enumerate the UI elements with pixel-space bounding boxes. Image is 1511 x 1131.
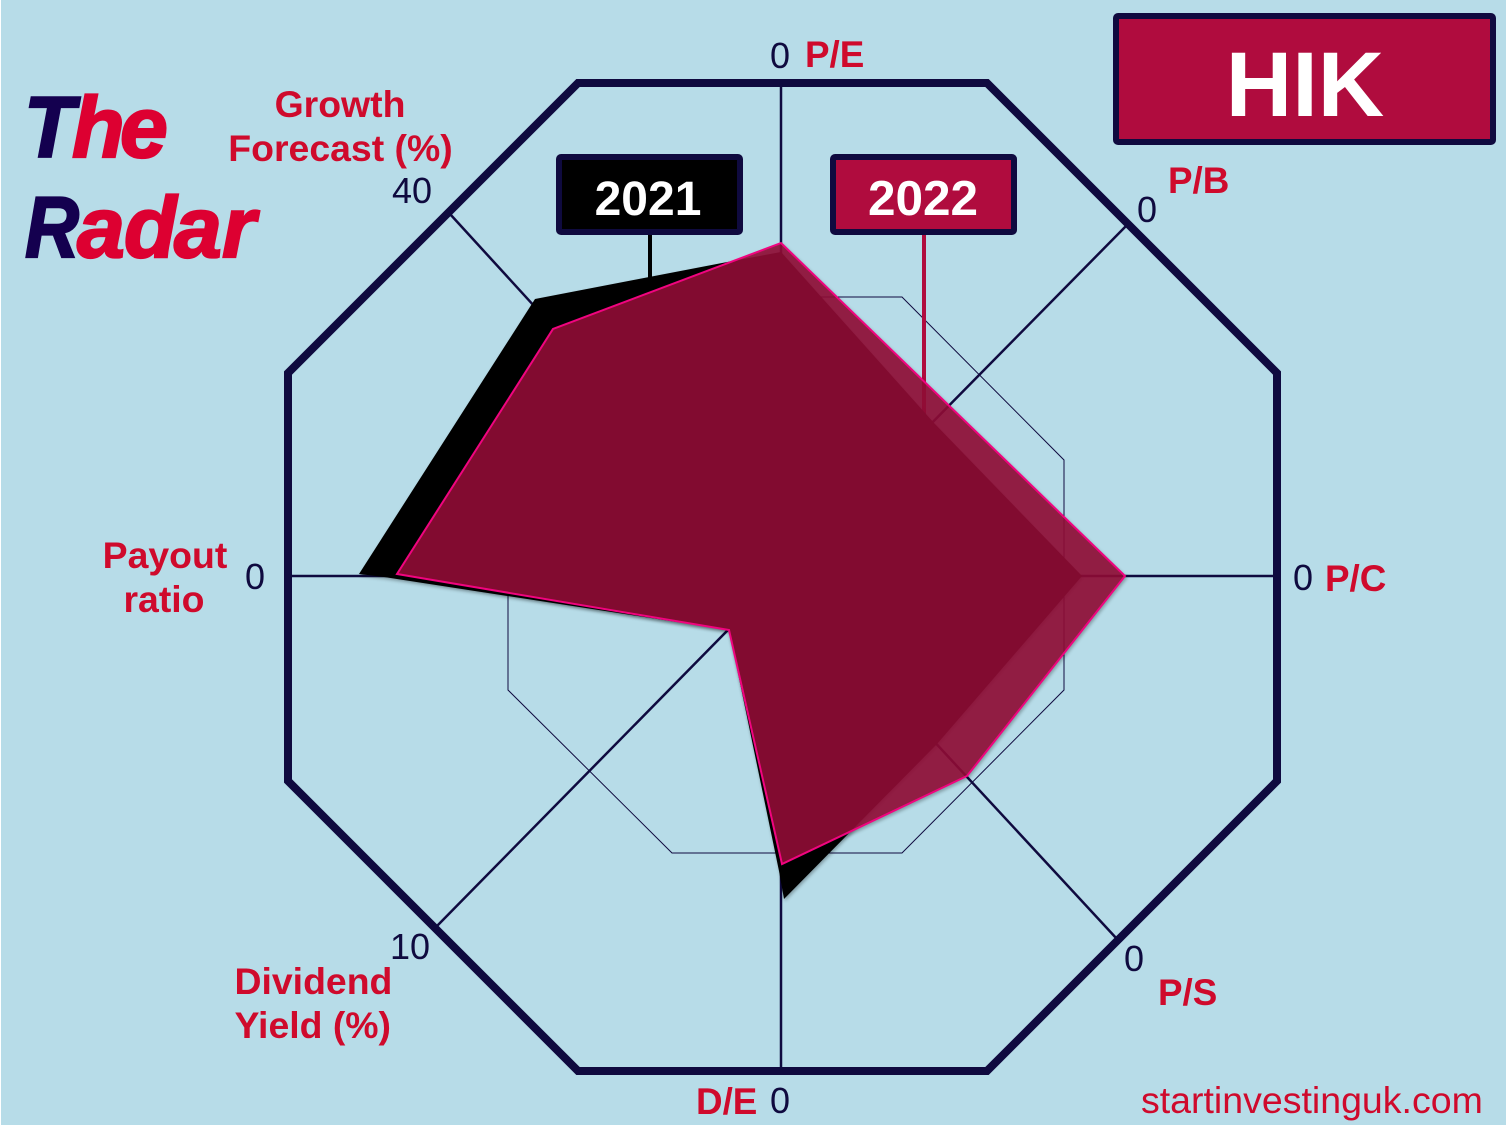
radar polygon: 2022 — [397, 243, 1125, 864]
title — [24, 79, 260, 276]
label: D/E: D/E — [696, 1081, 757, 1122]
label: P/E: 0 — [770, 35, 790, 76]
legend box: 2021: 2021 — [595, 173, 701, 226]
title line: Radar: d — [124, 180, 178, 276]
callout stem: 2021 — [648, 234, 652, 282]
label: P/B — [1137, 160, 1229, 230]
label: Growth Forecast: Forecast (%) — [228, 127, 453, 169]
label: P/S: P/S — [1158, 972, 1217, 1013]
label: Payout ratio: Payout — [103, 534, 227, 576]
title line: The: e — [120, 80, 168, 176]
label: P/B: 0 — [1137, 189, 1157, 230]
title line: The: T — [24, 79, 81, 175]
title line: Radar: r — [222, 180, 260, 276]
legend box: 2021 — [559, 157, 740, 232]
label: D/E — [696, 1080, 790, 1122]
axis lines — [288, 83, 1277, 1071]
title line: Radar: a — [174, 180, 222, 276]
title line: The: h — [72, 80, 125, 176]
label: Growth Forecast: Growth — [275, 83, 405, 125]
label: P/C: 0 — [1293, 557, 1313, 598]
label: Dividend Yield — [234, 926, 430, 1046]
label: P/E: P/E — [805, 34, 864, 75]
label: P/S: 0 — [1124, 938, 1144, 979]
label: P/B: P/B — [1168, 160, 1229, 201]
label: Payout ratio: 0 — [245, 556, 265, 597]
title line: Radar: a — [77, 180, 125, 276]
label: Growth Forecast: 40 — [392, 170, 432, 211]
label: D/E: 0 — [770, 1080, 790, 1121]
website credit: startinvestinguk.com — [1141, 1079, 1483, 1121]
title line: Radar — [25, 180, 260, 276]
label: P/S — [1124, 938, 1217, 1013]
label: P/E — [770, 34, 864, 76]
title line: The — [24, 79, 168, 176]
label: Dividend Yield: 10 — [390, 926, 430, 967]
ticker box: HIK — [1116, 16, 1493, 142]
callout stem: 2022 — [922, 234, 926, 420]
radar grid — [288, 83, 1277, 1071]
legend box: 2022 — [833, 157, 1014, 232]
legend box: 2022: 2022 — [868, 171, 978, 226]
label: Growth Forecast — [228, 83, 453, 211]
label: P/C — [1293, 557, 1386, 599]
label: Payout ratio: ratio — [123, 578, 205, 620]
label: Payout ratio — [103, 534, 265, 620]
inner octagon gridline — [508, 297, 1064, 853]
ticker box: HIK: HIK — [1226, 34, 1384, 136]
label: Dividend Yield: Yield (%) — [234, 1004, 391, 1046]
outer octagon — [288, 83, 1277, 1071]
radar polygon: 2021 — [359, 252, 1082, 899]
label: P/C: P/C — [1325, 558, 1386, 599]
label: Dividend Yield: Dividend — [234, 960, 392, 1002]
title line: Radar: R — [25, 180, 79, 276]
